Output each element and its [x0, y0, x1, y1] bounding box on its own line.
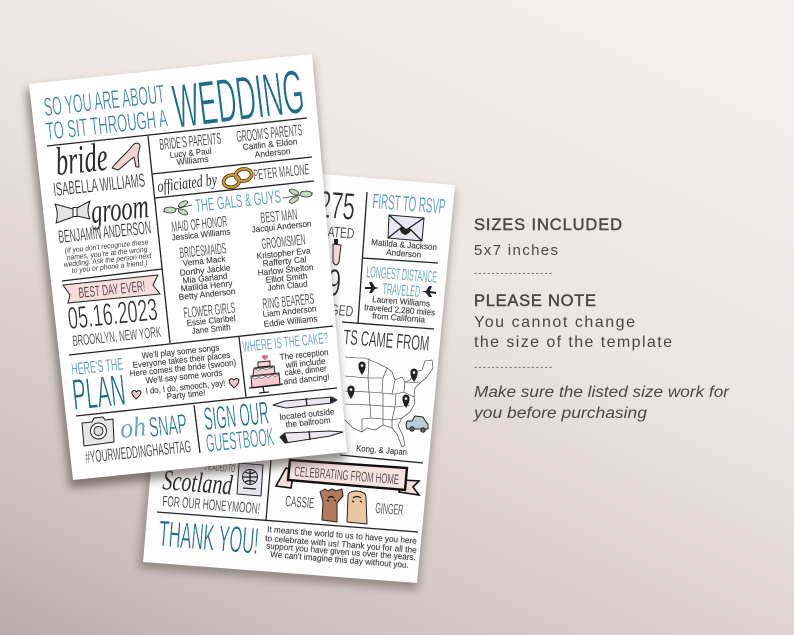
panel: celebrating from home [276, 460, 419, 524]
panel: where is the cake: cake, dinner [284, 363, 327, 377]
panel: oh snap: oh [118, 411, 148, 445]
heading: please note: PLEASE NOTE [474, 292, 596, 310]
title: TO SIT THROUGH A [45, 105, 169, 146]
panel: parents: Caitlin & Eldon [242, 136, 298, 152]
panel: sign our guestbook: located outside [279, 406, 335, 422]
text: wrong wedding note: (If you don't recognize these [64, 237, 149, 255]
panel: the gals and guys: Kristopher Eva [256, 245, 311, 261]
text: wrong wedding note [63, 237, 153, 275]
icon: heart left [132, 390, 141, 399]
heading: where guests came from: TS CAME FROM [343, 326, 430, 356]
panel: front card [29, 54, 347, 480]
panel: officiant [156, 161, 310, 196]
panel: first to RSVP: Anderson [386, 247, 422, 260]
icon: wedding rings [222, 168, 253, 188]
text: thank you note [265, 524, 417, 570]
panel: the gals and guys: Mia Garland [182, 271, 228, 285]
panel: the gals and guys: GROOMSMEN [261, 231, 306, 253]
panel: parents [159, 122, 303, 167]
panel: back card: FIRST TO RSVP [372, 190, 446, 219]
panel: the gals and guys: Verna Mack [182, 253, 227, 268]
panel: where is the cake: The reception [279, 347, 329, 362]
panel: bride and groom: ISABELLA WILLIAMS [52, 170, 146, 201]
panel: date and place: BEST DAY EVER! [78, 278, 146, 302]
icon: brown paw [320, 489, 343, 522]
panel: the gals and guys: Jessica Williams [171, 226, 231, 242]
panel: front card: WEDDING [169, 57, 308, 142]
panel: front card: BENJAMIN ANDERSON [57, 217, 152, 247]
panel: the gals and guys [163, 186, 318, 336]
icon: passport [237, 463, 263, 496]
text: cannot change size: You cannot change [474, 314, 635, 331]
panel: the gals and guys: John Claud [267, 279, 308, 293]
panel: here's the plan: Here comes the bride (swoon) [129, 357, 237, 378]
shadow: back card [139, 168, 455, 590]
panel: the gals and guys: BRIDESMAIDS [179, 240, 227, 262]
icon: leaf sprig left [163, 199, 192, 216]
text: cannot change size [474, 314, 672, 351]
panel: the gals and guys: BEST MAN [260, 206, 298, 227]
panel: the gals and guys: Jacqui Anderson [251, 218, 312, 234]
icon: map pin 2 [410, 369, 418, 382]
panel: bride and groom: groom [89, 188, 151, 231]
panel: the gals and guys: Elliot Smith [265, 271, 308, 285]
panel: longest distance [364, 264, 438, 325]
icon: wedding cake [249, 355, 283, 393]
panel: honeymoon: FOR OUR HONEYMOON! [162, 493, 261, 518]
icon: plane left [422, 286, 436, 297]
icon: pen bottom [280, 431, 343, 443]
shadow: front card [26, 60, 346, 488]
text: wrong wedding note: names, you're at the wrong [66, 244, 149, 262]
icon: map pin 4 [402, 395, 410, 408]
icon: pen top [273, 397, 337, 408]
panel: date and place: 05.16.2023 [66, 292, 159, 336]
panel: here's the plan: We'll play some songs [141, 342, 220, 360]
divider one: ------------------ [474, 268, 552, 278]
panel: oh snap [82, 408, 192, 467]
panel: sign our guestbook: SIGN OUR [202, 394, 270, 437]
panel: where is the cake: will include [284, 356, 326, 370]
panel: back card: LONGEST DISTANCE [366, 264, 438, 287]
title: SO YOU ARE ABOUT [42, 79, 166, 122]
panel: first to RSVP: Matilda & Jackson [371, 237, 438, 252]
panel: honeymoon: Scotland [161, 465, 234, 502]
map: United States [345, 357, 433, 447]
text: purchase advice: you before purchasing [473, 405, 647, 422]
divider two: ------------------ [474, 362, 552, 372]
panel: celebrating from home: GINGER [375, 500, 404, 519]
icon: high heel [112, 143, 140, 170]
panel: product notes [473, 216, 730, 422]
text: wrong wedding note: wedding. Ask the person next [63, 251, 153, 269]
icon: car [406, 416, 428, 432]
panel: the gals and guys: Harlow Shelton [257, 262, 314, 278]
text: thank you note: to celebrate with us! Thank you for all the [265, 533, 417, 555]
text: cannot change size: the size of the template [474, 334, 672, 351]
text: international guests: Kong, & Japan [356, 443, 408, 457]
icon: leaf sprig right [283, 188, 313, 205]
icon: map pin 1 [358, 362, 366, 375]
panel: longest distance: TRAVELED [382, 281, 421, 301]
text: thank you note: support you have given us over the years. [266, 541, 416, 562]
panel: back card: THANK YOU! [157, 513, 260, 562]
icon: camera [82, 417, 114, 446]
text: wrong wedding note: to you or phone a friend.) [71, 258, 148, 275]
panel: honeymoon [161, 461, 263, 518]
stat: guests invited [317, 184, 356, 243]
stat: guests invited: 275 [317, 184, 356, 229]
banner ribbon [276, 460, 419, 495]
panel: the gals and guys: Jane Smith [191, 322, 231, 336]
panel: the gals and guys: Eddie Williams [263, 313, 318, 329]
panel: front card: PETER MALONE [253, 161, 310, 184]
panel: the gals and guys: THE GALS & GUYS [194, 186, 282, 216]
text: purchase advice [473, 384, 730, 422]
icon: bow tie [55, 201, 90, 223]
panel: here's the plan: PLAN [70, 366, 128, 420]
panel: bride and groom: bride [53, 134, 110, 184]
text: purchase advice: Make sure the listed size work for [474, 384, 730, 401]
panel: sign our guestbook: the ballroom [285, 415, 331, 429]
panel: the gals and guys: Rafferty Cal [262, 254, 307, 268]
panel: here's the plan: Party time! [166, 387, 206, 401]
icon: plane right [365, 282, 379, 293]
panel: where is the cake: WHERE IS THE CAKE? [242, 330, 329, 356]
panel: parents: Anderson [254, 146, 291, 159]
panel: date and place: BROOKLYN, NEW YORK [72, 324, 162, 350]
stat: guests invited: DATED [320, 223, 355, 243]
panel: celebrating from home: CASSIE [285, 493, 315, 512]
panel: the gals and guys: Dorthy Jackie [179, 262, 231, 278]
panel: front card: GROOM'S PARENTS [236, 122, 303, 146]
panel: the gals and guys: Betty Anderson [178, 286, 236, 302]
panel: front card: #YOURWEDDINGHASHTAG [84, 437, 192, 467]
title [42, 57, 308, 146]
panel: oh snap: SNAP [147, 408, 188, 443]
panel: the gals and guys: Liam Anderson [262, 303, 317, 319]
panel: here's the plan: I do, I do, smooch, yay! [145, 378, 226, 396]
panel: longest distance: from California [372, 311, 426, 325]
icon: tan paw [347, 491, 367, 524]
icon: heart right [229, 378, 239, 388]
panel: here's the plan: Everyone takes their places [132, 350, 231, 370]
panel: parents: BRIDE'S PARENTS [159, 131, 222, 154]
panel: parents: Williams [176, 154, 209, 167]
panel: front card: RING BEARERS [262, 291, 315, 313]
stat: guests engaged: 19 [312, 261, 343, 305]
panel: the gals and guys: Matilda Henry [180, 278, 234, 293]
panel: where is the cake [242, 330, 330, 393]
panel: officiant: officiated by [156, 170, 218, 196]
panel: honeymoon: HEADED TO [205, 461, 236, 475]
text: thank you note: We can't imagine this day without you. [270, 549, 409, 570]
panel: the gals and guys: FLOWER GIRLS [183, 300, 236, 322]
panel: here's the plan: HERE'S THE [70, 355, 124, 379]
panel: sign our guestbook: GUESTBOOK [205, 423, 275, 458]
panel: here's the plan: We'll say some words [145, 367, 223, 385]
heading: sizes included: SIZES INCLUDED [474, 216, 622, 234]
panel: longest distance: traveled 2,280 miles [364, 302, 435, 318]
panel: where is the cake: and dancing! [283, 372, 330, 386]
panel: the gals and guys: Essie Claribel [186, 313, 236, 328]
panel: back card [143, 162, 455, 583]
panel: here's the plan [70, 342, 239, 420]
panel: parents: Lucy & Paul [169, 146, 212, 160]
text: size: 5x7 inches [474, 242, 558, 259]
ribbon: best day ever [63, 275, 160, 303]
icon: map pin 3 [347, 386, 355, 399]
text: thank you note: It means the world to us to have you here [267, 524, 417, 546]
panel: sign our guestbook [202, 394, 343, 458]
banner ribbon: CELEBRATING FROM HOME [294, 463, 400, 487]
panel: the gals and guys: MAID OF HONOR [171, 213, 228, 236]
panel: bride and groom [52, 134, 153, 275]
icon: champagne glass [333, 239, 341, 265]
icon: envelope [388, 215, 424, 241]
panel: date and place [63, 275, 162, 350]
panel: longest distance: Lauren Williams [372, 294, 430, 309]
stat: guests engaged: AGED [323, 301, 354, 320]
panel: first to RSVP [371, 190, 446, 260]
